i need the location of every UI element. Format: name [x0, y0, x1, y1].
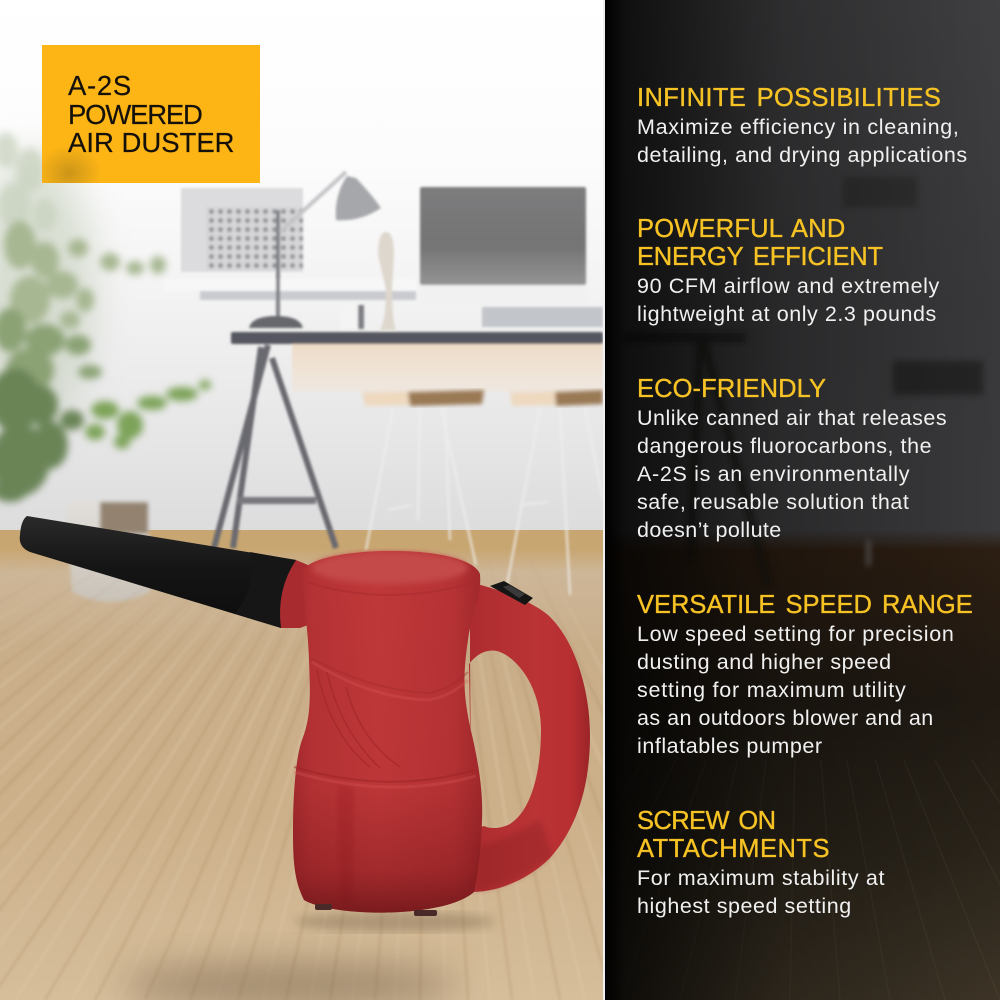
badge: product name — [42, 45, 260, 183]
blurred room silhouettes — [658, 178, 984, 580]
feature: eco-friendly: dangerous fluorocarbons, the — [637, 434, 932, 458]
feature: powerful and energy efficient: POWERFUL AND — [637, 215, 845, 243]
floor shadows — [120, 961, 460, 1000]
right dark panel — [605, 0, 1000, 1000]
feature: infinite possibilities — [637, 84, 968, 167]
handle base shade — [474, 820, 552, 892]
feature: versatile speed range — [636, 591, 973, 758]
feature: screw on attachments: highest speed setting — [637, 894, 852, 918]
feature: eco-friendly: safe, reusable solution that — [637, 490, 909, 514]
feature: versatile speed range: as an outdoors blower and an — [637, 706, 934, 730]
feature: versatile speed range: Low speed setting for precision — [637, 622, 954, 646]
badge text: A-2S — [68, 70, 132, 101]
badge text: POWERED — [68, 98, 202, 130]
switch — [490, 581, 533, 605]
plant — [0, 132, 211, 502]
nozzle — [20, 516, 296, 628]
red collar — [280, 560, 308, 628]
stools — [362, 390, 603, 406]
feature: eco-friendly: doesn’t pollute — [637, 518, 782, 542]
deep red stripe — [337, 785, 354, 905]
feature: screw on attachments — [636, 807, 885, 918]
body top cap — [312, 552, 468, 584]
feature: infinite possibilities: INFINITE POSSIBILITIES — [637, 84, 941, 112]
feature: powerful and energy efficient — [637, 215, 940, 326]
product: air duster — [20, 516, 590, 916]
feature: versatile speed range: inflatables pumper — [637, 734, 823, 758]
feature: versatile speed range: dusting and higher speed — [637, 650, 892, 674]
body — [293, 551, 482, 913]
feature: eco-friendly: ECO-FRIENDLY — [637, 375, 826, 403]
feature: versatile speed range: setting for maximum utility — [637, 678, 907, 702]
feature: infinite possibilities: Maximize efficiency in cleaning, — [637, 115, 960, 139]
feature: eco-friendly: A-2S is an environmentally — [637, 462, 910, 486]
feature: infinite possibilities: detailing, and drying applications — [637, 143, 968, 167]
pot — [66, 500, 150, 602]
feature: powerful and energy efficient: ENERGY EFFICIENT — [637, 243, 883, 271]
furniture and desk objects — [163, 172, 603, 548]
badge text: AIR DUSTER — [68, 127, 235, 158]
feature: powerful and energy efficient: 90 CFM airflow and extremely — [637, 274, 940, 298]
floor boards — [0, 652, 603, 1000]
feet — [315, 904, 332, 910]
swirl detail — [317, 670, 400, 768]
feature: screw on attachments: SCREW ON — [637, 807, 775, 835]
feature: screw on attachments: For maximum stability at — [637, 866, 885, 890]
centre white divider — [603, 0, 605, 1000]
feature: powerful and energy efficient: lightweight at only 2.3 pounds — [637, 302, 937, 326]
handle — [469, 582, 590, 892]
feature: eco-friendly — [637, 375, 947, 542]
grooves — [311, 658, 468, 693]
left room — [0, 128, 603, 1000]
body base shade — [293, 551, 482, 913]
feature: eco-friendly: Unlike canned air that releases — [637, 406, 947, 430]
feature: versatile speed range: VERSATILE SPEED RANGE — [637, 591, 973, 619]
feature: screw on attachments: ATTACHMENTS — [637, 835, 830, 863]
badge text — [68, 70, 235, 158]
